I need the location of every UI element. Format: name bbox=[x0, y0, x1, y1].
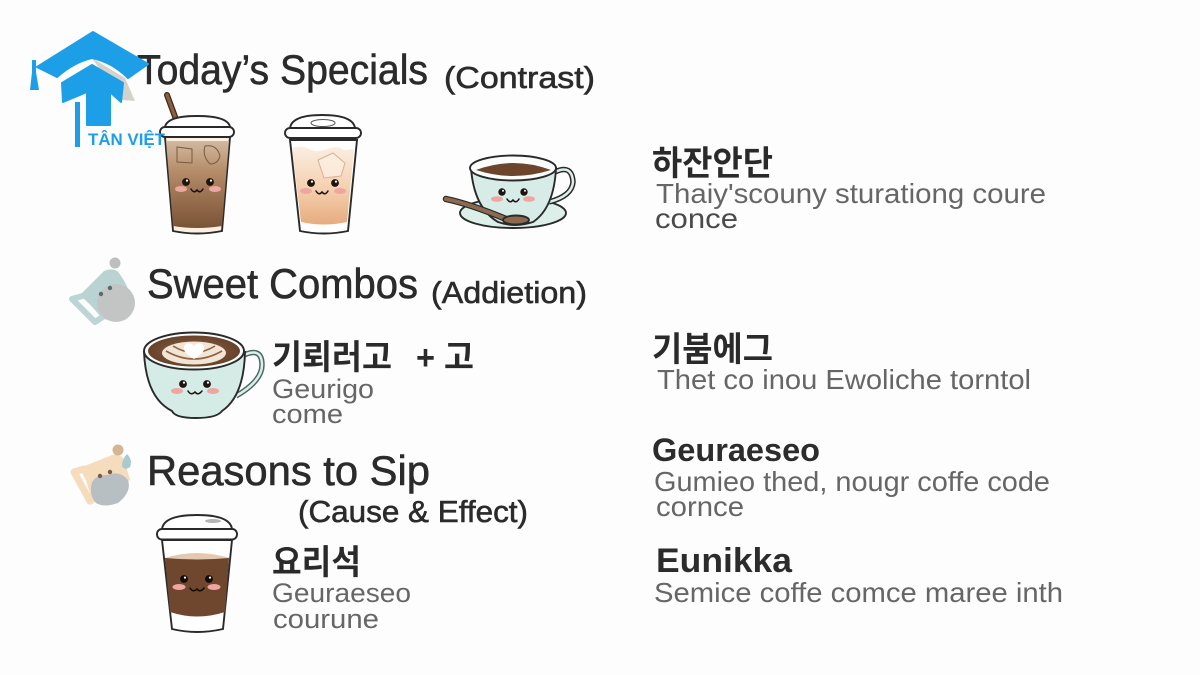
text block: addition connector: + 고 bbox=[416, 339, 474, 377]
text block: cause connector left: courune bbox=[273, 604, 379, 634]
text block: geuraeseo: Geuraeseo bbox=[652, 432, 820, 468]
subheading: cause and effect: (Cause & Effect) bbox=[298, 494, 528, 529]
subheading: addition: (Addietion) bbox=[431, 275, 587, 310]
icon: iced latte cup bbox=[285, 115, 361, 234]
text block: cause connector left bbox=[272, 544, 411, 634]
text block: cause connector left: Geuraeseo bbox=[272, 578, 411, 608]
text block: eunikka: Eunikka bbox=[656, 542, 793, 580]
icon: pale blue pitcher bbox=[72, 258, 135, 322]
panel: reasons to sip bbox=[74, 432, 1063, 634]
heading: sweet combos: Sweet Combos bbox=[147, 260, 418, 307]
text block: geuraeseo: cornce bbox=[656, 491, 744, 522]
icon: teacup with saucer and spoon bbox=[446, 156, 573, 228]
icon: latte art cup bbox=[144, 332, 262, 418]
text block: cause connector left: 요리석 bbox=[272, 544, 361, 582]
text block: addition connector: come bbox=[272, 399, 343, 429]
text block: addition connector: Geurigo bbox=[272, 374, 374, 404]
icon: peach pitcher bbox=[74, 444, 131, 506]
icon: takeaway coffee cup bbox=[157, 515, 237, 632]
text block: gibbeum connector: Thet co inou Ewoliche torntol bbox=[657, 364, 1031, 395]
text block: contrast connector bbox=[652, 145, 1046, 234]
heading: reasons to sip: Reasons to Sip bbox=[147, 447, 430, 494]
text block: contrast connector: Thaiy'scouny sturationg coure bbox=[656, 178, 1046, 209]
heading: today's specials: Today’s Specials bbox=[137, 46, 428, 93]
icon: iced coffee cup bbox=[160, 95, 234, 234]
text block: contrast connector: conce bbox=[655, 203, 738, 234]
text block: contrast connector: 하잔안단 bbox=[652, 145, 773, 183]
logo: Tan Viet bbox=[30, 32, 165, 149]
text block: gibbeum connector: 기붐에그 bbox=[652, 331, 773, 369]
text block: addition connector bbox=[272, 339, 474, 429]
text block: eunikka: Semice coffe comce maree inth bbox=[654, 577, 1063, 608]
panel: today's specials bbox=[137, 46, 1046, 234]
text block: geuraeseo: Gumieo thed, nougr coffe code bbox=[654, 466, 1050, 497]
text block: geuraeseo bbox=[652, 432, 1050, 522]
logo wordmark: TÂN VIỆT bbox=[88, 130, 165, 149]
text block: eunikka bbox=[654, 542, 1063, 608]
text block: addition connector: 기뢰러고 bbox=[272, 339, 392, 377]
text block: gibbeum connector bbox=[652, 331, 1031, 395]
subheading: contrast: (Contrast) bbox=[444, 60, 595, 95]
panel: sweet combos bbox=[72, 258, 1031, 429]
